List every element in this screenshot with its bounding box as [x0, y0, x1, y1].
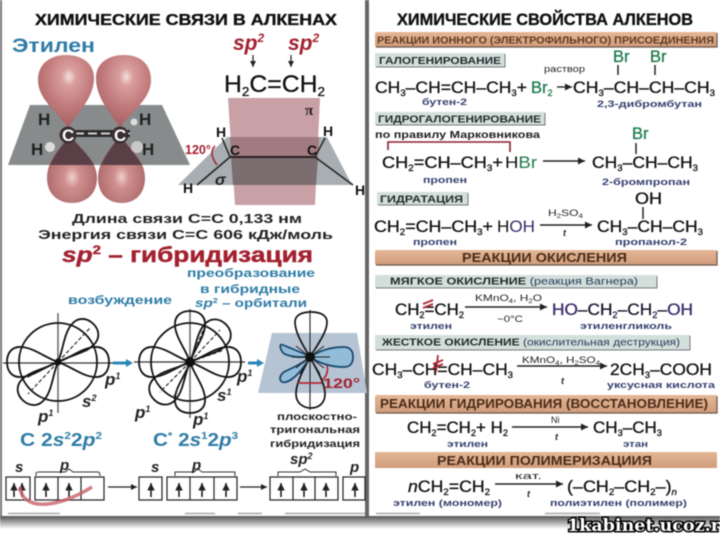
reaction: hydrogenation: + H	[476, 419, 503, 437]
sub-label: hydrohalogenation	[375, 112, 545, 126]
sp2 labels with arrows: 2	[312, 31, 320, 45]
reaction: destructive oxidation: KMnO	[522, 355, 548, 365]
sub-label: halogenation	[375, 53, 505, 67]
sigma and pi bond planes diagram: C	[230, 142, 240, 158]
reaction: Wagner oxidation: 2	[419, 310, 425, 320]
reaction: Wagner oxidation: 2	[528, 299, 534, 305]
orbital boxes: hybrid state: 2	[307, 451, 313, 461]
note: Markovnikov rule: по правилу Марковникова	[375, 130, 541, 141]
orbital boxes: ground state: s	[15, 459, 23, 476]
electron configuration: ground: 2	[95, 431, 103, 442]
heading: sp2 hybridization: sp	[62, 244, 93, 267]
reaction: hydrogenation: –CH	[623, 419, 657, 437]
reaction: destructive oxidation: уксусная кислота	[607, 380, 716, 391]
orbital diagram: excited carbon: 1	[203, 411, 208, 421]
reaction: butene-2 bromination: Br	[613, 48, 630, 66]
reaction: propene hydration	[374, 190, 703, 248]
ethylene orbital model: H	[142, 140, 154, 159]
orbital boxes: ground state	[6, 457, 104, 504]
electron configuration: excited: 2	[208, 430, 219, 450]
reaction: butene-2 bromination: +	[517, 79, 527, 97]
reaction: butene-2 bromination: Br	[650, 48, 667, 66]
reaction: polymerization: 2	[609, 487, 614, 497]
arrow	[108, 486, 137, 488]
reaction: Wagner oxidation: ~0°C	[497, 314, 524, 324]
reaction: polymerization: кат.	[515, 471, 542, 481]
sigma and pi bond planes diagram: σ	[215, 172, 227, 189]
reaction: hydrogenation: CH	[593, 419, 617, 437]
reaction: propene hydration: t	[563, 228, 567, 238]
sub-label: hydration	[377, 192, 468, 206]
orbital diagram: excited carbon: p	[135, 403, 145, 422]
reaction: destructive oxidation: 3	[645, 370, 650, 380]
orbital diagram: ground state carbon: p	[105, 370, 115, 389]
orbital diagram: excited carbon: 1	[247, 368, 252, 378]
reaction: destructive oxidation	[372, 355, 716, 391]
reaction: destructive oxidation: 4	[596, 361, 601, 367]
reaction: hydrogenation: CH	[407, 419, 431, 437]
reaction: polymerization	[393, 471, 687, 509]
reaction: propene hydrobromination: 3	[693, 163, 698, 173]
reaction: propene hydration: SO	[561, 208, 579, 218]
reaction: Wagner oxidation: этилен	[410, 321, 452, 332]
reaction: Wagner oxidation: HO–CH	[552, 301, 611, 319]
ethylene orbital model: H	[31, 140, 43, 159]
reaction: destructive oxidation: , H	[559, 355, 574, 365]
sp2 labels with arrows: 2	[257, 31, 265, 45]
reaction: Wagner oxidation	[395, 293, 693, 332]
reaction: propene hydration: 3	[622, 227, 628, 237]
reaction: destructive oxidation: –CH=CH–CH	[403, 361, 508, 379]
orbital diagram: ground state carbon: 1	[48, 408, 53, 418]
caption: conversion into hybrid orbitals: sp	[195, 296, 213, 310]
reaction: Wagner oxidation: OH	[667, 301, 693, 319]
title: chemical properties: ХИМИЧЕСКИЕ СВОЙСТВА АЛКЕНОВ	[397, 10, 693, 29]
reaction: destructive oxidation: 3	[508, 370, 513, 380]
reaction: polymerization: 2	[485, 487, 490, 497]
orbital diagram: sp2 trigonal	[258, 310, 367, 410]
reaction: butene-2 bromination: 3	[511, 88, 517, 98]
orbital boxes: hybrid state: sp	[290, 451, 308, 468]
ethylene orbital model: C	[114, 126, 126, 145]
reaction: polymerization: (–CH	[567, 478, 606, 496]
caption: planar trigonal hybridization	[270, 412, 360, 450]
reaction: Wagner oxidation: 2	[652, 310, 657, 320]
reaction: destructive oxidation: t	[561, 376, 565, 386]
electron configuration: excited: 2	[172, 430, 190, 450]
reaction: propene hydration: =CH–CH	[405, 218, 477, 236]
reaction: hydrogenation: =CH	[437, 419, 471, 437]
reaction: butene-2 bromination	[375, 48, 715, 110]
ethylene formula: H	[224, 71, 241, 98]
reaction: propene hydration: 2	[400, 227, 405, 237]
electron configuration: excited: 1	[201, 431, 208, 442]
reaction: destructive oxidation: 2	[574, 361, 580, 367]
reaction: polymerization: n	[672, 487, 677, 497]
reaction: propene hydrobromination: +	[492, 154, 503, 172]
reaction: polymerization: –)	[656, 478, 672, 496]
reaction: propene hydration: CH	[597, 218, 621, 236]
orbital boxes: ground state: p	[59, 457, 69, 474]
reaction: propene hydration: 2	[557, 214, 562, 220]
reaction: propene hydration: 3	[698, 227, 703, 237]
sub-label: hard oxidation: ЖЕСТКОЕ ОКИСЛЕНИЕ (окислительная деструкция)	[381, 338, 680, 348]
reaction: butene-2 bromination: –CH=CH–CH	[406, 79, 511, 97]
reaction: butene-2 bromination: раствор	[544, 64, 585, 74]
reaction: Wagner oxidation: KMnO	[475, 293, 501, 303]
watermark: 1kabinet.ucoz.r	[567, 516, 720, 536]
ethylene formula: 2	[318, 84, 325, 99]
reaction: butene-2 bromination: 3	[400, 88, 406, 98]
orbital boxes: excited state	[139, 457, 237, 500]
reaction: polymerization: –CH	[614, 478, 650, 496]
section band: hydrogenation reactions	[375, 395, 717, 413]
reaction: hydrogenation: 2	[503, 428, 508, 438]
caption: conversion into hybrid orbitals: преобразование	[187, 266, 315, 280]
reaction: hydrogenation: 3	[657, 428, 662, 438]
orbital diagram: excited carbon: 1	[226, 387, 231, 397]
reaction: Wagner oxidation: , H	[513, 293, 528, 303]
footer small print	[8, 512, 365, 514]
reaction: propene hydrobromination: HBr	[505, 154, 538, 172]
reaction: propene hydrobromination: 3	[617, 163, 623, 173]
reaction: destructive oxidation: 2CH	[610, 361, 643, 379]
caption: excitation: возбуждение	[68, 293, 172, 307]
sigma and pi bond planes diagram: H	[323, 123, 333, 139]
section band: oxidation reactions: РЕАКЦИИ ОКИСЛЕНИЯ	[462, 250, 627, 265]
orbital diagram: excited carbon: p	[237, 367, 247, 386]
reaction: butene-2 bromination: CH	[375, 79, 399, 97]
caption: planar trigonal hybridization: плоскостно-	[277, 412, 357, 423]
orbital diagram: ground state carbon: s	[82, 392, 91, 411]
bond length and energy: Энергия связи C=C 606 кДж/моль	[38, 228, 333, 242]
title: chemical bonds: ХИМИЧЕСКИЕ СВЯЗИ В АЛКЕНАХ	[35, 12, 338, 29]
reaction: Wagner oxidation: –CH	[618, 301, 652, 319]
reaction: propene hydration: HOH	[497, 218, 535, 236]
reaction: hydrogenation: 3	[618, 428, 623, 438]
bond length and energy	[38, 212, 333, 242]
orbital diagram: ground state carbon	[3, 313, 120, 426]
reaction: destructive oxidation: –COOH	[650, 361, 712, 379]
reaction: hydrogenation: 2	[431, 428, 437, 438]
arrow	[240, 486, 267, 488]
section band: ionic addition reactions	[375, 32, 717, 47]
section band: oxidation reactions	[375, 250, 717, 265]
reaction: butene-2 bromination: Br	[531, 79, 548, 97]
orbital diagram: excited carbon: s	[217, 386, 226, 405]
reaction: propene hydration: CH	[374, 218, 398, 236]
orbital boxes: hybrid state	[270, 451, 365, 500]
orbital diagram: excited carbon	[134, 309, 252, 429]
reaction: propene hydrobromination: CH	[382, 154, 406, 172]
electron configuration: ground: 2	[64, 431, 71, 442]
sigma and pi bond planes diagram: C	[307, 142, 317, 158]
heading: sp2 hybridization: – гибридизация	[101, 244, 313, 267]
heading: sp2 hybridization: 2	[93, 243, 101, 257]
section band: polymerization reactions	[375, 452, 717, 468]
reaction: propene hydration: 3	[477, 227, 483, 237]
reaction: propene hydrobromination: 2	[408, 163, 414, 173]
electron configuration: excited: p	[218, 430, 232, 450]
caption: planar trigonal hybridization: тригональная	[270, 425, 360, 436]
reaction: polymerization: этилен (мономер)	[393, 498, 502, 509]
ethylene orbital model: C	[62, 126, 74, 145]
reaction: Wagner oxidation: 4	[509, 299, 514, 305]
sigma and pi bond planes diagram	[178, 98, 365, 205]
orbital diagram: sp2 trigonal: 120°	[323, 375, 360, 391]
reaction: polymerization: t	[527, 489, 531, 499]
reaction: propene hydrobromination: пропен	[423, 175, 467, 186]
arrow: hybridization	[248, 359, 264, 367]
caption: conversion into hybrid orbitals	[187, 266, 315, 310]
orbital diagram: ground state carbon: p	[38, 407, 48, 426]
panel: chemical properties of alkenes	[372, 10, 717, 514]
sigma and pi bond planes diagram: H	[216, 124, 226, 140]
reaction: butene-2 bromination: 3	[598, 88, 604, 98]
section band: polymerization reactions: РЕАКЦИИ ПОЛИМЕРИЗАЦИИЯ	[437, 453, 652, 468]
electron configuration: excited: *	[168, 431, 173, 442]
reaction: propene hydrobromination: =CH–CH	[414, 154, 487, 172]
reaction: Wagner oxidation: этиленгликоль	[580, 321, 672, 332]
orbital boxes: excited state: p	[191, 457, 201, 474]
electron configuration: ground: C 2 s	[20, 430, 63, 450]
sp2 labels with arrows: sp	[288, 32, 313, 55]
caption: conversion into hybrid orbitals: в гибридные	[200, 282, 300, 296]
sub-label: hydrohalogenation: ГИДРОГАЛОГЕНИРОВАНИЕ	[378, 114, 541, 126]
electron configuration: ground: 2	[71, 430, 83, 450]
reaction: polymerization: nCH	[408, 478, 442, 496]
reaction: propene hydrobromination: CH	[592, 154, 616, 172]
reaction: propene hydrobromination: –CH–CH	[623, 154, 693, 172]
reaction: hydrogenation: t	[555, 432, 559, 442]
ethylene formula: C=CH	[249, 71, 318, 98]
sub-label: halogenation: ГАЛОГЕНИРОВАНИЕ	[379, 56, 501, 67]
reaction: butene-2 bromination: 2,3-дибромбутан	[597, 99, 702, 110]
orbital diagram: ground state carbon: 1	[115, 371, 120, 381]
sigma and pi bond planes diagram: π	[305, 103, 314, 119]
reaction: destructive oxidation: SO	[579, 355, 596, 365]
electron configuration: ground: p	[81, 430, 95, 450]
bond length and energy: Длина связи C=C 0,133 нм	[72, 212, 302, 226]
ethylene orbital model: H	[139, 110, 151, 129]
reaction: propene hydration: –CH–CH	[628, 218, 698, 236]
reaction: butene-2 bromination: –CH–CH–CH	[604, 79, 710, 97]
section band: ionic addition reactions: РЕАКЦИИ ИОННОГО (ЭЛЕКТРОФИЛЬНОГО) ПРИСОЕДИНЕНИЯ	[377, 36, 714, 46]
reaction: destructive oxidation: 3	[397, 370, 403, 380]
sigma and pi bond planes diagram: 120°	[185, 143, 211, 157]
sub-label: mild oxidation	[375, 275, 657, 288]
reaction: hydrogenation: 2	[471, 428, 476, 438]
reaction: propene hydration: пропанол-2	[615, 237, 687, 248]
reaction: destructive oxidation: 4	[555, 361, 560, 367]
reaction: hydrogenation	[407, 415, 662, 450]
caption: conversion into hybrid orbitals: – орбитали	[218, 296, 307, 310]
reaction: Wagner oxidation: –	[657, 301, 668, 319]
reaction: butene-2 bromination: бутен-2	[422, 97, 467, 108]
sub-label: hard oxidation	[375, 335, 690, 350]
reaction: butene-2 bromination: CH	[573, 79, 597, 97]
electron configuration: excited: C	[153, 430, 166, 450]
section band: hydrogenation reactions: РЕАКЦИИ ГИДРИРОВАНИЯ (ВОССТАНОВЛЕНИЕ)	[380, 397, 708, 411]
reaction: hydrogenation: этан	[623, 439, 648, 450]
orbital diagram: excited carbon: 1	[145, 404, 150, 414]
reaction: Wagner oxidation: O	[533, 293, 542, 303]
reaction: propene hydration: OH	[635, 190, 662, 208]
reaction: butene-2 bromination: 2	[548, 88, 553, 98]
reaction: butene-2 bromination: 3	[710, 88, 715, 98]
reaction: Wagner oxidation: CH	[395, 301, 419, 319]
reaction: propene hydration: +	[483, 218, 493, 236]
sub-label: mild oxidation: МЯГКОЕ ОКИСЛЕНИЕ (реакция Вагнера)	[390, 276, 638, 288]
reaction: polymerization: =CH	[449, 478, 485, 496]
footer small print	[376, 512, 600, 514]
heading: ethylene: Этилен	[12, 36, 95, 57]
reaction: propene hydration: пропен	[413, 237, 457, 248]
sub-label: hydration: ГИДРАТАЦИЯ	[380, 194, 463, 206]
orbital boxes: excited state: s	[151, 459, 159, 476]
sp2 labels with arrows	[233, 31, 320, 67]
electron configuration: excited: s	[190, 430, 201, 450]
reaction: polymerization: 2	[443, 487, 449, 497]
sp2 labels with arrows: sp	[233, 32, 258, 55]
caption: planar trigonal hybridization: гибридизация	[270, 438, 360, 450]
reaction: propene hydration: H	[548, 208, 554, 218]
electron configuration: excited: 3	[232, 431, 239, 442]
reaction: propene hydration: 4	[579, 214, 584, 220]
reaction: propene hydrobromination: 3	[487, 163, 492, 173]
ethylene formula: 2	[242, 84, 249, 99]
caption: conversion into hybrid orbitals: 2	[213, 298, 218, 305]
arrow: excitation	[113, 359, 133, 367]
reaction: polymerization: 2	[650, 487, 656, 497]
ethylene orbital model: H	[38, 110, 50, 129]
reaction: destructive oxidation: бутен-2	[424, 380, 470, 391]
ethylene orbital model	[8, 55, 190, 203]
orbital boxes: hybrid state: p	[349, 459, 359, 476]
orbital diagram: excited carbon: p	[193, 410, 203, 429]
reaction: propene hydrobromination	[382, 125, 698, 188]
reaction: propene hydrobromination: Br	[632, 125, 649, 143]
sigma and pi bond planes diagram: H	[183, 180, 193, 196]
reaction: destructive oxidation: CH	[372, 361, 396, 379]
reaction: polymerization: полиэтилен (полимер)	[550, 498, 687, 509]
orbital diagram: ground state carbon: 2	[90, 393, 96, 403]
panel: chemical bonds in alkenes	[3, 12, 367, 514]
reaction: hydrogenation: Ni	[551, 415, 560, 425]
reaction: Wagner oxidation: 2	[459, 310, 464, 320]
sigma and pi bond planes diagram: H	[355, 182, 365, 198]
reaction: Wagner oxidation: =CH	[425, 301, 459, 319]
reaction: hydrogenation: этилен	[447, 439, 488, 450]
reaction: Wagner oxidation: 2	[612, 310, 618, 320]
reaction: propene hydrobromination: 2-бромпропан	[602, 177, 690, 188]
